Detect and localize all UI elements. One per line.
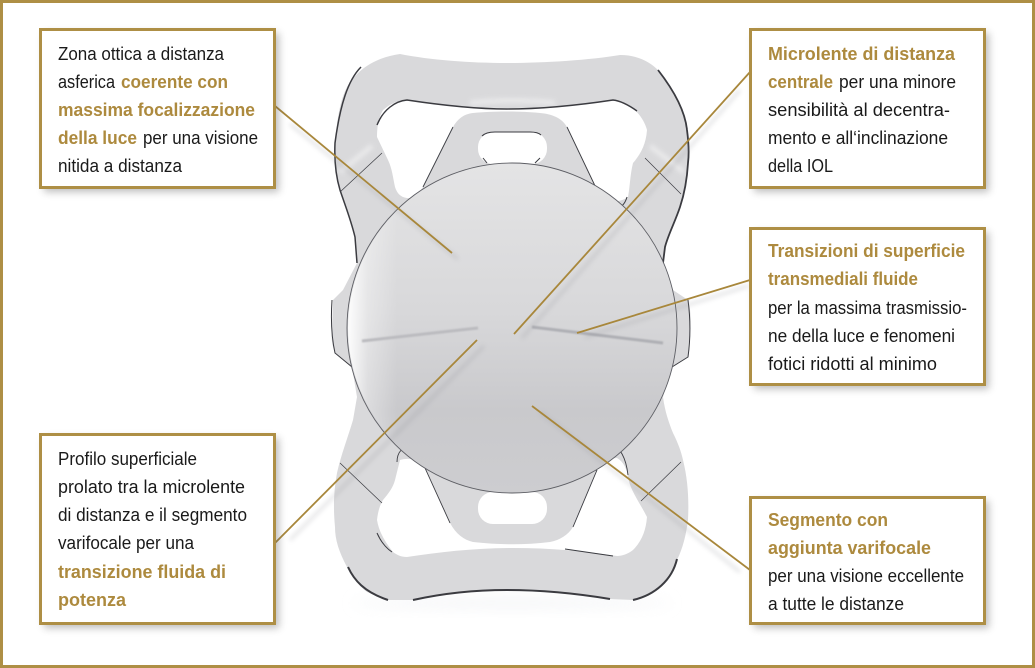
panel: central distance microlens: Microlente di distanza xyxy=(768,43,956,64)
panel: prolate surface profile: prolato tra la microlente xyxy=(58,476,245,497)
panel: central distance microlens: sensibilità al decentra- xyxy=(768,99,950,120)
panel: aspheric distance zone: coerente con xyxy=(121,71,228,92)
panel: prolate surface profile: Profilo superficiale xyxy=(58,448,197,469)
leader: surface transitions xyxy=(577,280,750,333)
panel: transmedial surface transitions: Transizioni di superficie xyxy=(768,240,965,261)
panel: aspheric distance zone xyxy=(40,30,279,192)
panel: prolate surface profile: potenza xyxy=(58,589,127,610)
leader: distance zone xyxy=(275,106,452,253)
panel: aspheric distance zone: per una visione xyxy=(143,127,258,148)
panel: prolate surface profile: transizione fluida di xyxy=(58,561,226,582)
panel: transmedial surface transitions: per la massima trasmissio- xyxy=(768,297,967,318)
panel: transmedial surface transitions: ne della luce e fenomeni xyxy=(768,325,955,346)
panel: varifocal add segment: per una visione eccellente xyxy=(768,565,964,586)
leader: varifocal segment xyxy=(532,406,750,570)
leader lines xyxy=(275,72,750,570)
haptic highlights xyxy=(340,101,684,172)
panel: central distance microlens xyxy=(750,30,989,192)
panel: central distance microlens: della IOL xyxy=(768,155,833,176)
panel: varifocal add segment: aggiunta varifocale xyxy=(768,537,931,558)
lens illustration xyxy=(331,54,691,608)
leader: central microlens xyxy=(514,72,750,334)
panel: prolate surface profile xyxy=(40,434,279,628)
panel: prolate surface profile: di distanza e il segmento xyxy=(58,504,247,525)
panel: central distance microlens: mento e all‘inclinazione xyxy=(768,127,948,148)
panel: aspheric distance zone: massima focalizzazione xyxy=(58,99,255,120)
left transition stripe xyxy=(362,328,478,341)
soft ground shadow xyxy=(352,598,672,608)
optic left highlight xyxy=(348,164,676,492)
panel: transmedial surface transitions: transmediali fluide xyxy=(768,268,918,289)
panel: transmedial surface transitions: fotici ridotti al minimo xyxy=(768,353,937,374)
panel: aspheric distance zone: Zona ottica a distanza xyxy=(58,43,225,64)
panel: transmedial surface transitions xyxy=(750,228,989,389)
panel: prolate surface profile: varifocale per una xyxy=(58,532,195,553)
haptic frame xyxy=(332,54,691,600)
lower slot xyxy=(478,492,547,524)
right transition stripe xyxy=(532,327,663,343)
haptic edge strokes xyxy=(331,67,690,600)
optic disc xyxy=(347,163,677,493)
panel: varifocal add segment: Segmento con xyxy=(768,509,888,530)
leader: prolate profile xyxy=(275,340,477,543)
panel: aspheric distance zone: nitida a distanza xyxy=(58,155,183,176)
panel: varifocal add segment xyxy=(750,498,989,628)
panel: central distance microlens: centrale xyxy=(768,71,833,92)
upper slot xyxy=(478,132,547,164)
leader line shadows xyxy=(290,90,748,572)
panel: aspheric distance zone: asferica xyxy=(58,71,116,92)
panel: aspheric distance zone: della luce xyxy=(58,127,137,148)
panel: central distance microlens: per una minore xyxy=(839,71,956,92)
panel: varifocal add segment: a tutte le distanze xyxy=(768,593,904,614)
